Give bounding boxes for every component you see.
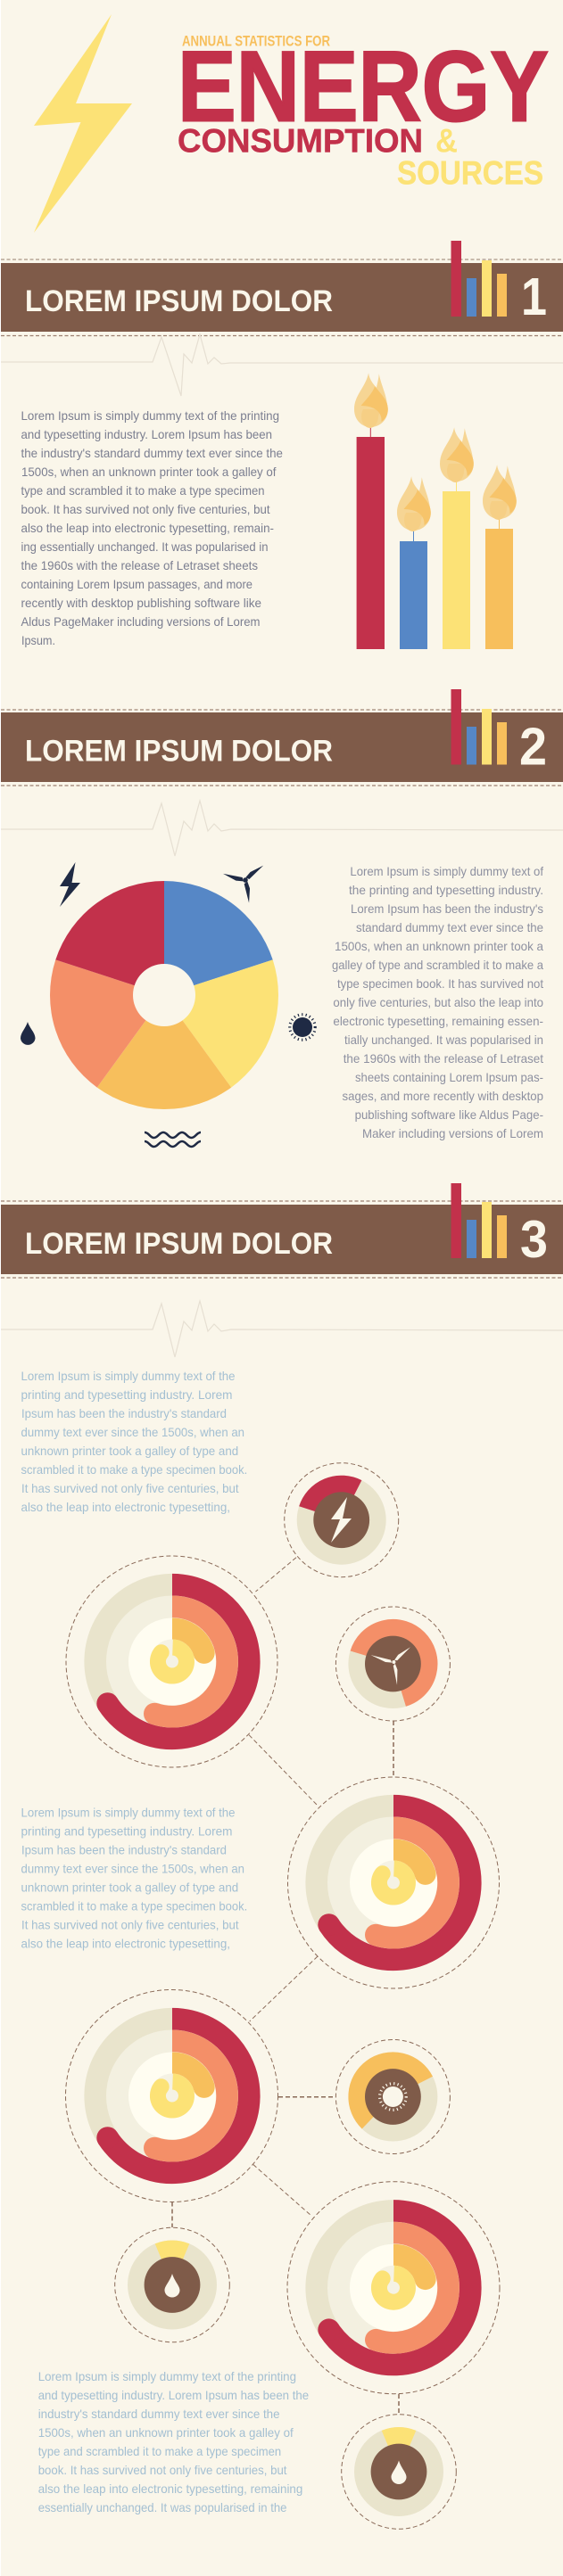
slice: yellow (164, 959, 278, 1088)
icon: navy water drop (21, 1022, 36, 1045)
text block: section 3 third: 1500s, when an unknown printer took a galley of (38, 2425, 294, 2440)
text block: section 3 third (38, 2369, 309, 2514)
text block: section 3 second: Lorem Ipsum is simply dummy text of the (21, 1805, 236, 1819)
section band 1 (1, 241, 563, 335)
icon: navy bolt (60, 862, 80, 907)
small donut: bolt (285, 1463, 399, 1577)
text block: section 1: Ipsum. (21, 633, 55, 647)
small donut: water drop left (115, 2227, 229, 2342)
text block: section 3 third: type and scrambled it to make a type specimen (38, 2444, 281, 2458)
section number 2: 2 (519, 717, 547, 776)
text block: section 1: Aldus PageMaker including versions of Lorem (21, 614, 261, 629)
heading: consumption: CONSUMPTION (178, 123, 423, 159)
text block: section 3 first: Lorem Ipsum is simply dummy text of the (21, 1369, 236, 1383)
text block: section 2: publishing software like Aldus Page- (355, 1107, 543, 1122)
text block: section 2: type specimen book. It has survived not (337, 976, 543, 991)
text block: section 3 third: and typesetting industry. Lorem Ipsum has been the (38, 2388, 309, 2402)
text block: section 1: ing essentially unchanged. It was popularised in (21, 539, 268, 554)
large radial chart: third (66, 1990, 278, 2202)
text block: section 2: the printing and typesetting industry. (349, 883, 543, 897)
section number 1: 1 (521, 267, 547, 326)
text block: section 3 third: Lorem Ipsum is simply dummy text of the printing (38, 2369, 296, 2383)
icon: lightning bolt (34, 14, 132, 233)
pie chart (50, 881, 278, 1109)
slice: red (55, 881, 164, 995)
section number 3: 3 (520, 1210, 548, 1269)
section band 2 (1, 689, 563, 786)
text block: section 1: recently with desktop publishing software like (21, 596, 261, 610)
text block: section 1: type and scrambled it to make a type specimen (21, 483, 264, 498)
text block: section 3 first: scrambled it to make a type specimen book. (21, 1462, 247, 1477)
text block: section 2: electronic typesetting, remaining essen- (333, 1014, 543, 1028)
slice: salmon (50, 959, 164, 1088)
icon: navy wind turbine (222, 863, 264, 903)
text block: section 3 first: unknown printer took a galley of type and (21, 1444, 238, 1458)
text block: section 1: book. It has survived not only five centuries, but (21, 502, 270, 516)
large radial chart: second (287, 1777, 500, 1988)
slice: orange (97, 995, 231, 1109)
text block: section 3 second: It has survived not only five centuries, but (21, 1917, 239, 1931)
band heading 1: LOREM IPSUM DOLOR (25, 284, 333, 318)
heading: ampersand: & (435, 123, 458, 159)
text block: section 2: Lorem Ipsum has been the industry's (351, 901, 543, 916)
slice: blue (164, 881, 273, 995)
small donut: sun (335, 2040, 450, 2154)
text block: section 2: Lorem Ipsum is simply dummy text of (350, 864, 543, 878)
text block: section 1: 1500s, when an unknown printer took a galley of (21, 465, 277, 479)
text block: section 2: tially unchanged. It was popularised in (344, 1033, 543, 1047)
text block: section 2: sages, and more recently with desktop (343, 1089, 543, 1103)
text block: section 2 (332, 864, 543, 1140)
text block: section 2: galley of type and scrambled it to make a (332, 958, 543, 972)
text block: section 3 first: dummy text ever since the 1500s, when an (21, 1425, 244, 1439)
mini bar chart 3 (451, 1183, 507, 1258)
text block: section 3 first (21, 1369, 247, 1514)
text block: section 1: the industry's standard dummy text ever since the (21, 446, 283, 460)
text block: section 3 second: Ipsum has been the industry's standard (21, 1842, 227, 1856)
text block: section 3 second: scrambled it to make a type specimen book. (21, 1899, 247, 1913)
text block: section 3 first: also the leap into electronic typesetting, (21, 1500, 230, 1514)
icon: navy waves (145, 1132, 201, 1147)
text block: section 1 (21, 408, 283, 647)
mini bar chart 1 (451, 241, 507, 317)
dashed connectors (172, 1558, 399, 2415)
candle: blue (397, 476, 431, 649)
text block: section 3 third: industry's standard dummy text ever since the (38, 2407, 280, 2421)
title (178, 30, 549, 191)
candle chart (354, 373, 517, 649)
text block: section 1: containing Lorem Ipsum passages, and more (21, 577, 253, 591)
text block: section 2: only five centuries, but also the leap into (333, 995, 543, 1009)
text block: section 3 second: printing and typesetting industry. Lorem (21, 1824, 232, 1839)
candle: red (354, 373, 388, 649)
text block: section 3 second (21, 1805, 247, 1951)
text block: section 1: Lorem Ipsum is simply dummy text of the printing (21, 408, 279, 423)
text block: section 1: the 1960s with the release of Letraset sheets (21, 558, 258, 572)
text block: section 3 first: It has survived not only five centuries, but (21, 1481, 239, 1495)
mini bar chart 2 (451, 689, 507, 765)
text block: section 3 third: essentially unchanged. It was popularised in the (38, 2500, 287, 2514)
text block: section 1: also the leap into electronic typesetting, remain- (21, 521, 274, 535)
small donut: wind turbine (335, 1607, 450, 1721)
large radial chart: first (66, 1556, 277, 1767)
text block: section 2: standard dummy text ever since the (356, 920, 543, 934)
text block: section 2: sheets containing Lorem Ipsum pas- (355, 1070, 543, 1084)
large radial chart: fourth (287, 2182, 500, 2394)
candle: orange (483, 465, 517, 649)
heading: sources: SOURCES (397, 155, 543, 191)
band heading 3: LOREM IPSUM DOLOR (25, 1227, 333, 1261)
text block: section 1: and typesetting industry. Lorem Ipsum has been (21, 427, 272, 441)
section band 3 (1, 1183, 563, 1278)
text block: section 2: Maker including versions of Lorem (362, 1126, 543, 1140)
candle: yellow (440, 427, 474, 649)
text block: section 2: 1500s, when an unknown printer took a (335, 939, 543, 953)
text block: section 3 first: printing and typesetting industry. Lorem (21, 1387, 232, 1402)
text block: section 3 second: unknown printer took a galley of type and (21, 1880, 238, 1894)
text block: section 3 second: also the leap into electronic typesetting, (21, 1937, 230, 1951)
text block: section 2: the 1960s with the release of Letraset (344, 1051, 543, 1066)
small donut: water drop right (342, 2415, 456, 2529)
text block: section 3 first: Ipsum has been the industry's standard (21, 1406, 227, 1420)
icon: navy sun (290, 1015, 315, 1040)
text block: section 3 second: dummy text ever since the 1500s, when an (21, 1862, 244, 1876)
band heading 2: LOREM IPSUM DOLOR (25, 735, 333, 769)
text block: section 3 third: book. It has survived not only five centuries, but (38, 2463, 287, 2477)
text block: section 3 third: also the leap into electronic typesetting, remaining (38, 2481, 302, 2496)
subtitle: annual statistics: ANNUAL STATISTICS FOR (182, 32, 330, 50)
